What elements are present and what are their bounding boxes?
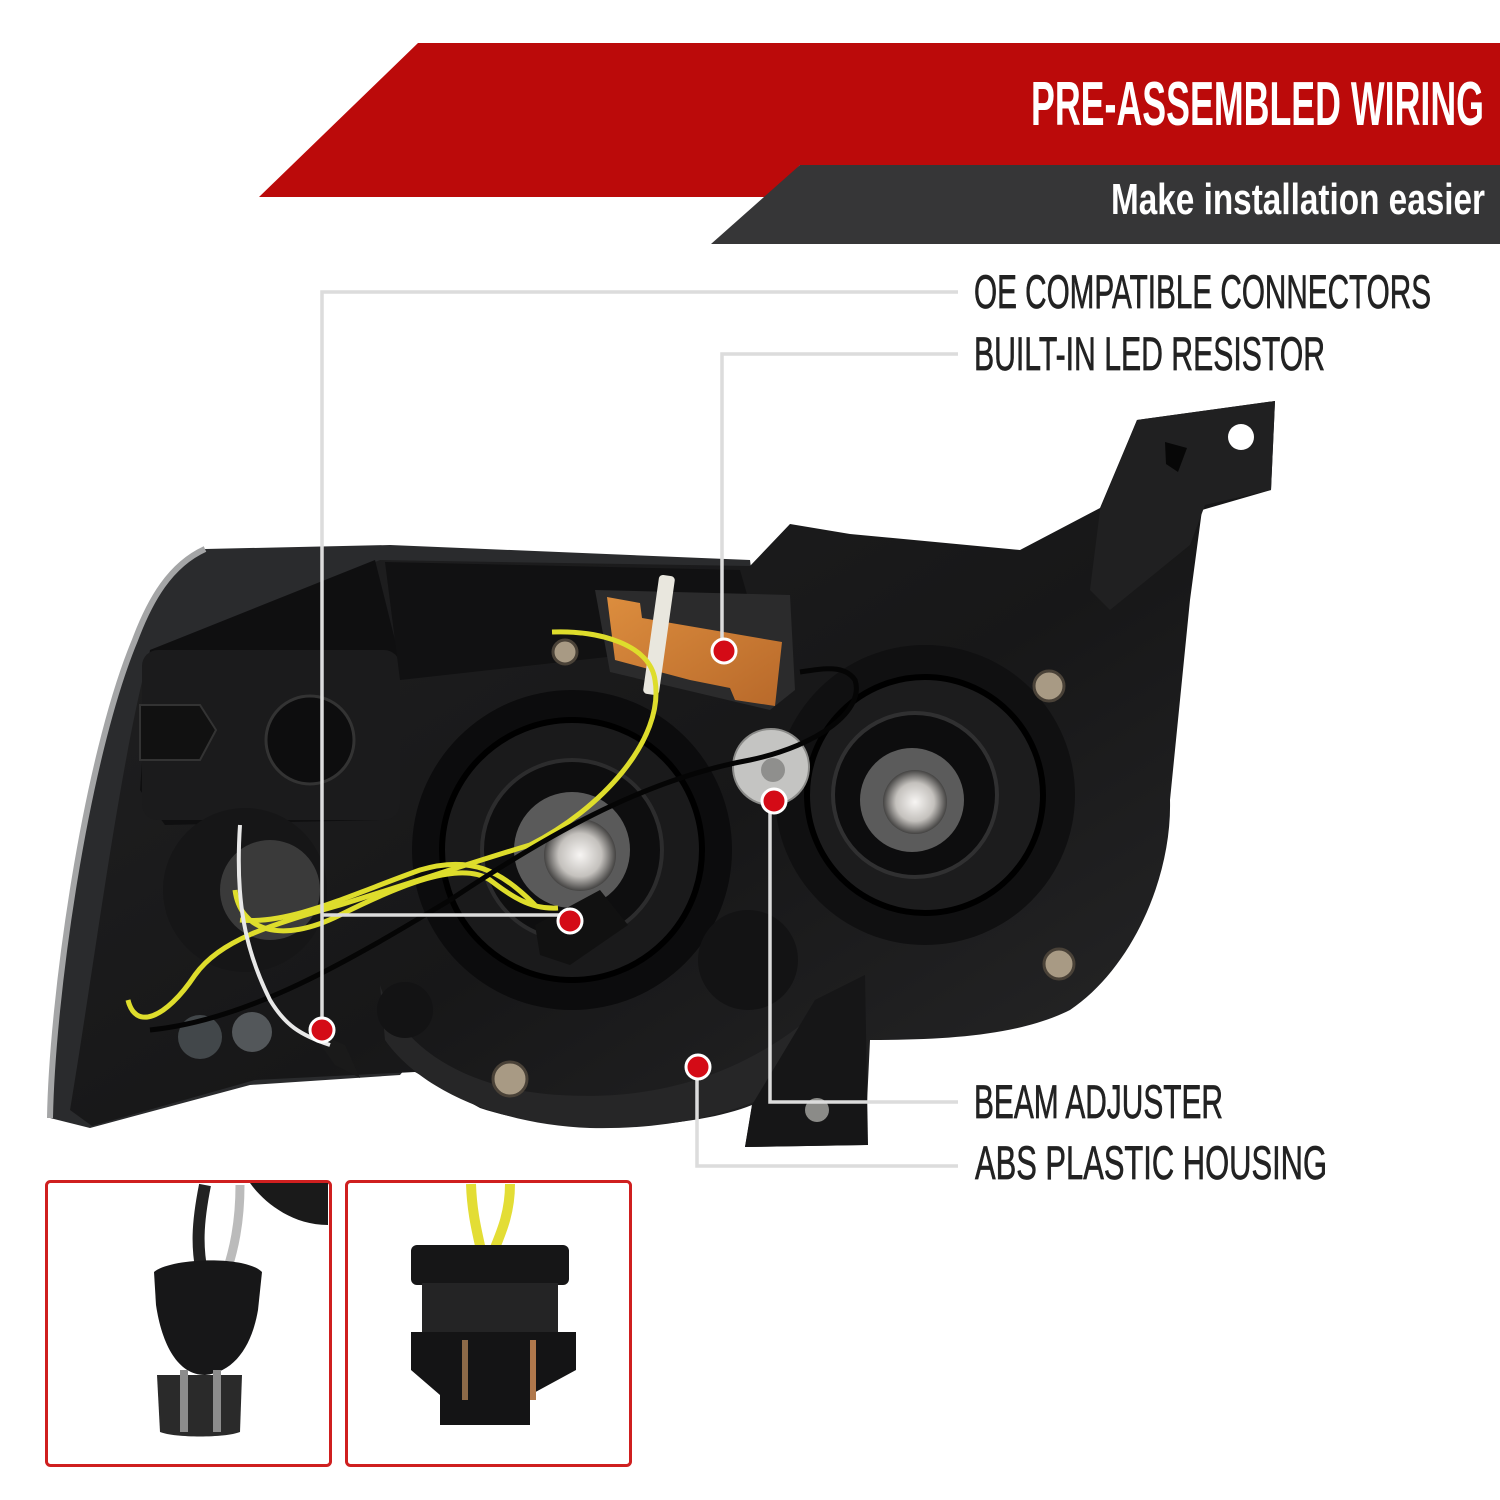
dark sub-banner: [711, 165, 1500, 244]
callout dots: [310, 639, 786, 1079]
bolts: [493, 640, 1074, 1096]
lens edge: [50, 545, 760, 1128]
bulb socket: [310, 1030, 360, 1078]
callout leader lines: [322, 292, 958, 1166]
yellow wires: [128, 632, 656, 1017]
inset: dual-wire socket: [346, 1182, 630, 1466]
small projector: [775, 645, 1075, 945]
upper bracket: [1090, 401, 1275, 610]
red banner: [259, 43, 1500, 197]
connector: [535, 890, 628, 965]
inset: single-bulb socket: [46, 1182, 330, 1466]
lower left lamp: [163, 808, 327, 972]
left block: [140, 560, 400, 825]
lower frame: [380, 985, 845, 1128]
lower bracket: [745, 975, 868, 1147]
black and white wires: [150, 669, 856, 1045]
large projector: [412, 690, 732, 1010]
top dark recess: [385, 562, 760, 680]
adjuster knob: [698, 910, 798, 1010]
screw washer: [733, 729, 809, 805]
resistor: [595, 574, 795, 710]
main housing: [70, 401, 1275, 1147]
label: ABS plastic housing: ABS PLASTIC HOUSING: [975, 1136, 1327, 1189]
headlight rear view: [50, 401, 1275, 1147]
label: beam adjuster: BEAM ADJUSTER: [974, 1075, 1223, 1128]
